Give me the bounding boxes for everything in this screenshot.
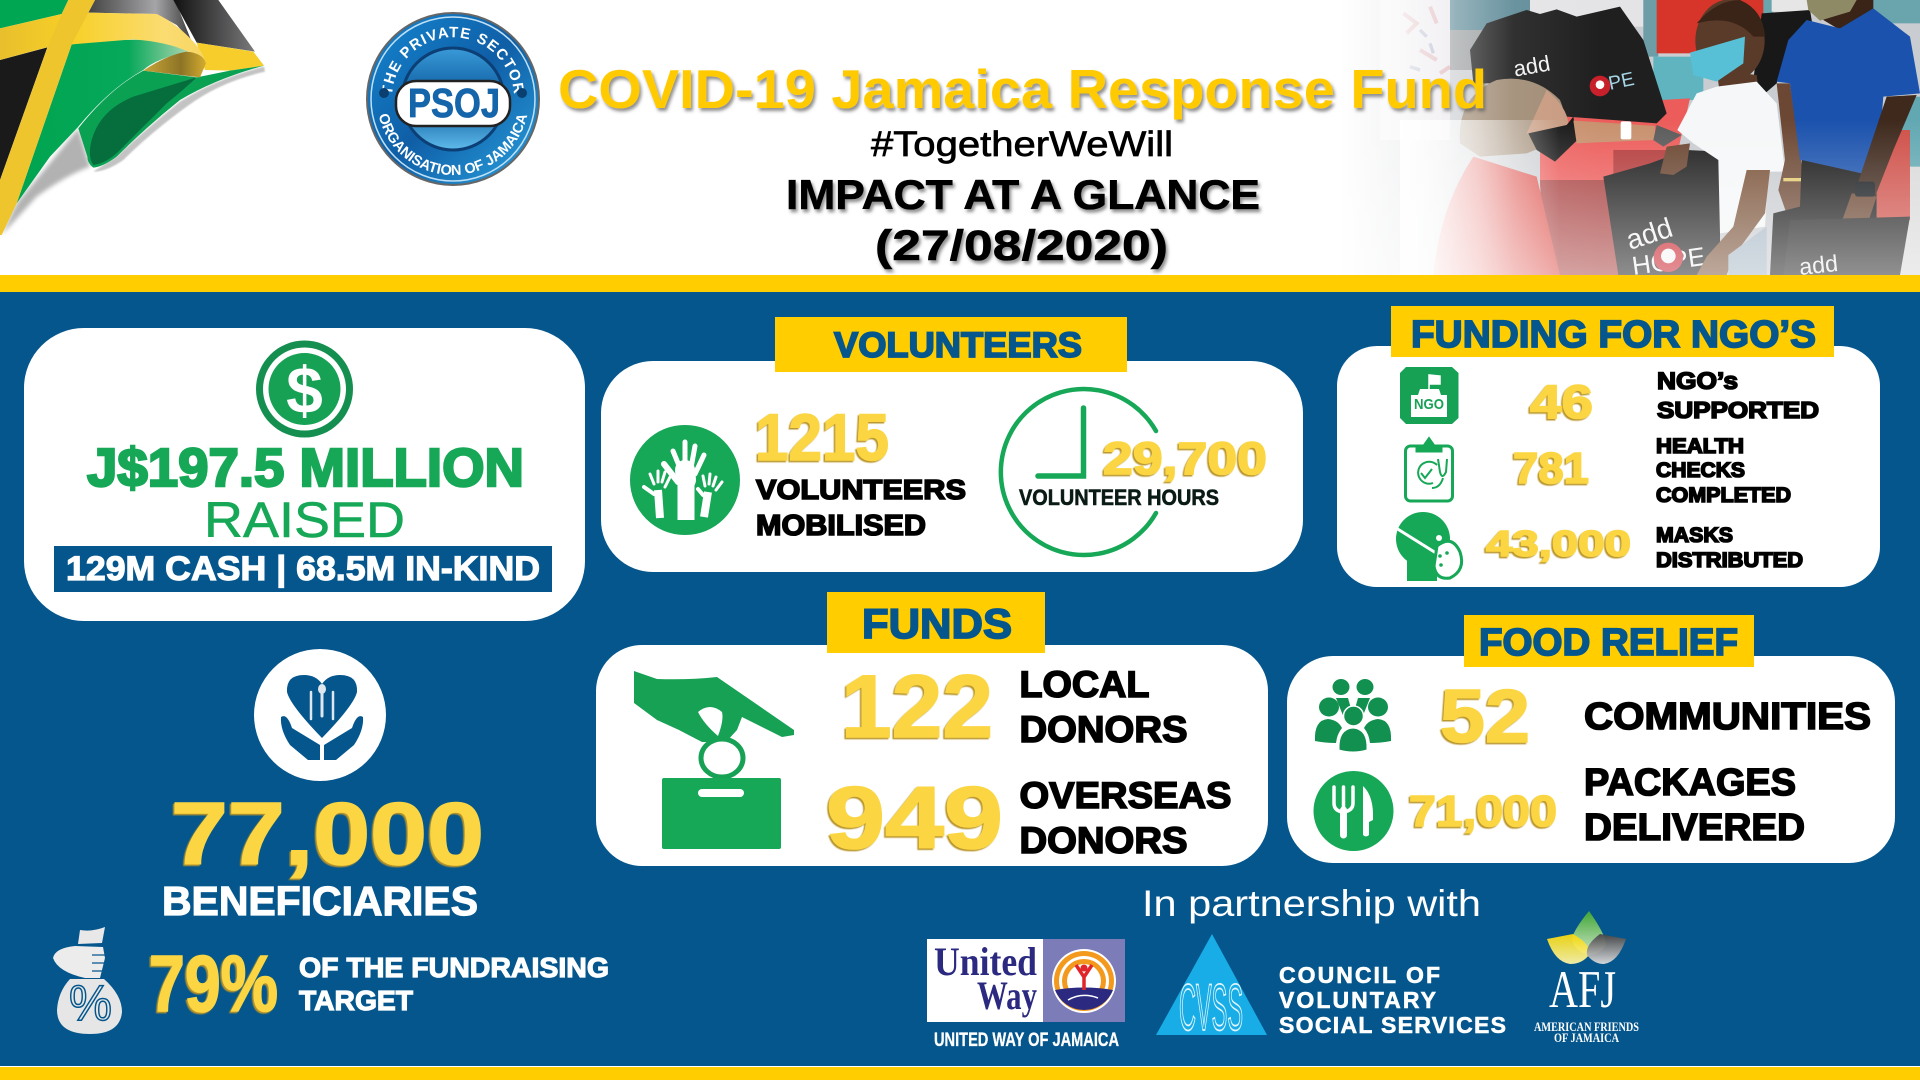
heading: funds: FUNDS — [862, 600, 1012, 647]
icon: fork and knife — [1314, 771, 1394, 851]
stat: volunteers mobilised — [755, 400, 966, 542]
logo: Private Sector Organisation of Jamaica — [366, 12, 540, 186]
stat: volunteers mobilised: MOBILISED — [756, 510, 926, 542]
icon: money bag with percent: % — [69, 975, 112, 1031]
stat: local donors: 122 — [841, 656, 993, 756]
icon: Jamaican flag — [0, 0, 265, 235]
photo: right bag lettering: add — [1798, 250, 1839, 280]
raised label: RAISED — [204, 492, 405, 548]
logo: Council of Voluntary Social Services — [1156, 934, 1506, 1044]
stat: masks distributed — [1486, 523, 1803, 572]
stat: health checks: CHECKS — [1656, 459, 1745, 482]
logo: Council of Voluntary Social Services: VOLUNTARY — [1279, 987, 1436, 1013]
stat: NGOs supported — [1530, 368, 1819, 428]
stat: NGOs supported: SUPPORTED — [1657, 397, 1819, 423]
stat: fundraising target: OF THE FUNDRAISING — [299, 952, 609, 983]
stat: beneficiaries: 77,000 — [171, 784, 484, 883]
stat: fundraising target: 79% — [149, 939, 278, 1028]
yellow header band — [0, 275, 1920, 292]
photo: volunteers handing out bags: HOPE — [1630, 241, 1707, 281]
stat: health checks: 781 — [1513, 444, 1589, 493]
stat: volunteer hours: 29,700 — [1103, 433, 1267, 484]
stat: NGOs supported: 46 — [1530, 375, 1593, 428]
stat: overseas donors: DONORS — [1020, 820, 1188, 861]
logo: American Friends of Jamaica — [1534, 911, 1639, 1045]
logo: Council of Voluntary Social Services: SOCIAL SERVICES — [1279, 1012, 1506, 1038]
logo wordmark: PSOJ — [408, 80, 500, 126]
logo: American Friends of Jamaica: AMERICAN FRIENDS — [1534, 1019, 1639, 1034]
panel: funds — [596, 592, 1268, 867]
icon: heart and hands — [254, 649, 386, 781]
panel: money raised — [24, 328, 585, 621]
icon: clock — [1001, 389, 1156, 555]
panel: volunteers — [601, 317, 1303, 572]
stat: local donors — [841, 656, 1188, 756]
photo: volunteers handing out bags — [1340, 0, 1920, 281]
heading: volunteers: VOLUNTEERS — [834, 326, 1082, 365]
logo ring text: bottom: ORGANISATION OF JAMAICA — [380, 114, 528, 176]
stat: fundraising target: TARGET — [299, 985, 413, 1016]
heading: funding for NGOs: FUNDING FOR NGO’S — [1411, 314, 1816, 356]
stat: communities: 52 — [1440, 674, 1530, 758]
subtitle: IMPACT AT A GLANCE — [786, 171, 1260, 218]
stat: health checks — [1513, 435, 1791, 507]
stat: fundraising target — [149, 939, 609, 1028]
date: (27/08/2020) — [875, 222, 1168, 270]
cash and in-kind strip: 129M CASH | 68.5M IN-KIND — [66, 550, 540, 588]
stat: packages delivered: DELIVERED — [1584, 807, 1805, 849]
stat: overseas donors: OVERSEAS — [1020, 775, 1232, 816]
stat: NGOs supported: NGO’s — [1657, 368, 1738, 395]
logo: United Way: Way — [977, 973, 1037, 1018]
stat: beneficiaries — [162, 784, 484, 924]
stat: packages delivered: 71,000 — [1409, 787, 1557, 836]
icon: masked face — [1396, 512, 1462, 581]
logo: Council of Voluntary Social Services: CVSS — [1179, 970, 1243, 1044]
photo: volunteers handing out bags: PE — [1607, 69, 1636, 95]
title: COVID-19 Jamaica Response Fund — [558, 58, 1487, 120]
heading: funds — [827, 592, 1045, 653]
logo: Council of Voluntary Social Services: COUNCIL OF — [1279, 962, 1440, 988]
stat: communities — [1440, 674, 1871, 758]
footer band — [0, 1066, 1920, 1080]
logo ring text: top: THE PRIVATE SECTOR — [382, 26, 524, 94]
logo: American Friends of Jamaica: OF JAMAICA — [1554, 1030, 1619, 1045]
stat: health checks: COMPLETED — [1656, 484, 1791, 507]
panel: funding for NGOs — [1337, 306, 1880, 587]
panel: food relief — [1287, 615, 1895, 863]
icon: people group — [1315, 679, 1391, 752]
icon: health check clipboard — [1406, 439, 1452, 501]
stat: volunteers mobilised: 1215 — [755, 400, 889, 474]
icon: money bag with percent — [53, 927, 122, 1034]
stat: communities: COMMUNITIES — [1584, 696, 1871, 738]
stat: overseas donors — [826, 768, 1232, 867]
partnership heading: In partnership with — [1142, 883, 1481, 924]
stat: packages delivered — [1409, 762, 1805, 849]
stat: volunteer hours — [1019, 433, 1267, 510]
stat: beneficiaries: BENEFICIARIES — [162, 878, 478, 924]
stat: local donors: LOCAL — [1020, 664, 1150, 705]
hashtag: #TogetherWeWill — [871, 125, 1173, 164]
icon: hand dropping coin in box — [634, 671, 794, 849]
icon: NGO building: NGO — [1414, 396, 1444, 413]
header background — [0, 0, 1920, 275]
logo: United Way — [927, 939, 1125, 1051]
logo: United Way: United — [934, 939, 1037, 984]
stat: masks distributed: MASKS — [1656, 524, 1733, 547]
icon: NGO building — [1400, 367, 1458, 424]
icon: raised hands — [630, 425, 740, 535]
photo: lower bag lettering: add — [1622, 212, 1676, 256]
stat: overseas donors: 949 — [826, 768, 1003, 867]
heading: food relief: FOOD RELIEF — [1479, 622, 1738, 664]
stat: volunteers mobilised: VOLUNTEERS — [756, 474, 966, 505]
stat: packages delivered: PACKAGES — [1584, 762, 1796, 804]
stat: volunteer hours: VOLUNTEER HOURS — [1019, 485, 1219, 510]
icon: dollar coin — [256, 340, 353, 438]
stat: masks distributed: DISTRIBUTED — [1656, 549, 1803, 572]
stat: masks distributed: 43,000 — [1486, 523, 1631, 564]
stat: health checks: HEALTH — [1656, 435, 1744, 458]
logo: American Friends of Jamaica: AFJ — [1549, 961, 1616, 1019]
logo: United Way: UNITED WAY OF JAMAICA — [934, 1030, 1119, 1051]
icon: dollar coin: $ — [286, 353, 323, 427]
heading: volunteers — [775, 317, 1127, 372]
stat: local donors: DONORS — [1020, 709, 1188, 750]
photo: bag lettering: add — [1512, 51, 1552, 82]
amount raised: J$197.5 MILLION — [87, 438, 524, 498]
